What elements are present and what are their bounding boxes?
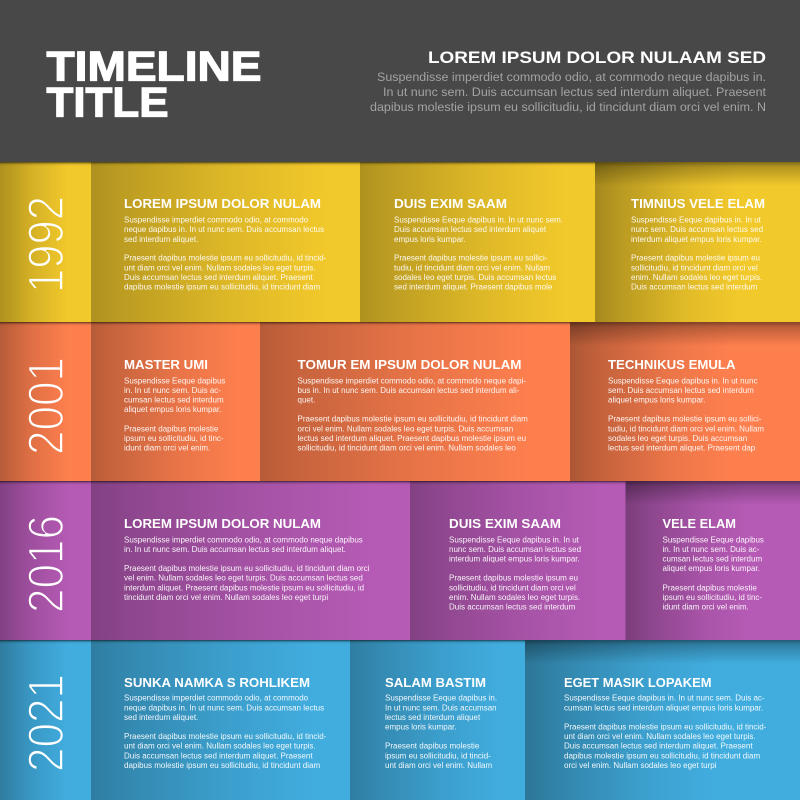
- panel: vele elam: ipsum eu sollicitudiu, id tinc-: [662, 593, 762, 602]
- panel: lorem ipsum dolor nulam: sed interdum aliquet.: [124, 235, 198, 244]
- panel: tomur em ipsum dolor nulam: bus in. In ut nunc sem. Duis accumsan lectus sed interdum ali-: [298, 386, 520, 395]
- panel: lorem ipsum dolor nulam: dapibus molestie ipsum eu sollicitudiu, id tincidunt diam: [124, 283, 320, 292]
- panel: duis exim saam: interdum aliquet empus loris kumpar.: [449, 555, 580, 564]
- header description: In ut nunc sem. Duis accumsan lectus sed interdum aliquet. Praesent: [383, 85, 767, 99]
- panel: lorem ipsum dolor nulam: Praesent dapibus molestie ipsum eu sollicitudiu, id tincid-: [124, 254, 327, 263]
- panel: eget masik lopakem: [525, 640, 800, 800]
- panel: lorem ipsum dolor nulam: Praesent dapibus molestie ipsum eu sollicitudiu, id tincidunt diam orci: [124, 564, 370, 573]
- panel: duis exim saam: DUIS EXIM SAAM: [394, 196, 507, 211]
- panel: technikus emula: lectus sed interdum aliquet. Praesent dap: [608, 444, 756, 453]
- panel: tomur em ipsum dolor nulam: lectus sed interdum aliquet. Praesent dapibus molestie ipsum eu: [298, 434, 526, 443]
- row: 2001: [0, 322, 800, 481]
- panel: timnius vele elam: enim. Nullam sodales leo eget turpis.: [631, 273, 762, 282]
- panel: timnius vele elam: Praesent dapibus molestie ipsum eu: [631, 254, 760, 263]
- row: 2021: [0, 640, 800, 800]
- panel: tomur em ipsum dolor nulam: [260, 322, 570, 481]
- title: TITLE: [46, 78, 168, 126]
- panel: sunka namka s rohlikem: dapibus molestie ipsum eu sollicitudiu, id tincidunt diam: [124, 761, 320, 770]
- panel: duis exim saam: Suspendisse Eeque dapibus in. In ut nunc sem.: [394, 216, 563, 224]
- panel: duis exim saam: tudiu, id tincidunt diam orci vel enim. Nullam: [394, 263, 550, 272]
- panel: duis exim saam: Duis accumsan lectus sed interdum: [449, 603, 576, 612]
- header panel: [0, 0, 800, 162]
- panel: sunka namka s rohlikem: [91, 640, 350, 800]
- panel: vele elam: Suspendisse Eeque dapibus: [662, 535, 764, 544]
- panel: duis exim saam: [360, 162, 595, 322]
- panel: master umi: Suspendisse Eeque dapibus: [124, 376, 225, 385]
- panel: eget masik lopakem: Duis accumsan lectus sed interdum aliquet. Praesent: [564, 742, 753, 751]
- year: 2021: 2021: [18, 674, 74, 772]
- panel: master umi: idunt diam orci vel enim.: [124, 444, 210, 453]
- panel: technikus emula: TECHNIKUS EMULA: [608, 357, 736, 372]
- year column shadow: [0, 640, 91, 800]
- year column shadow: [0, 481, 91, 640]
- panel: duis exim saam: Duis accumsan lectus sed interdum aliquet: [394, 225, 547, 234]
- panel: lorem ipsum dolor nulam: tincidunt diam orci vel enim. Nullam sodales leo eget turpi: [124, 593, 328, 602]
- panel: lorem ipsum dolor nulam: in. In ut nunc sem. Duis accumsan lectus sed interdum aliquet.: [124, 545, 346, 554]
- panel: eget masik lopakem: Suspendisse Eeque dapibus in. In ut nunc sem. Duis ac-: [564, 694, 765, 703]
- panel: lorem ipsum dolor nulam: unt diam orci vel enim. Nullam sodales leo eget turpis.: [124, 263, 316, 272]
- panel: duis exim saam: [410, 481, 626, 640]
- panel: eget masik lopakem: Praesent dapibus molestie ipsum eu sollicitudiu, id tincid-: [564, 722, 767, 731]
- header description: dapibus molestie ipsum eu sollicitudiu, id tincidunt diam orci vel enim. N: [370, 100, 766, 114]
- header description: [370, 70, 767, 114]
- panel: technikus emula: sodales leo eget turpis. Duis accumsan: [608, 434, 747, 443]
- panel: master umi: ipsum eu sollicitudiu, id tinc-: [124, 434, 224, 443]
- panel: vele elam: idunt diam orci vel enim.: [662, 603, 749, 612]
- panel: salam bastim: lectus sed interdum aliquet: [385, 713, 481, 722]
- panel: tomur em ipsum dolor nulam: Suspendisse imperdiet commodo odio, at commodo neque dapi-: [298, 376, 526, 385]
- panel: lorem ipsum dolor nulam: Duis accumsan lectus sed interdum aliquet. Praesent: [124, 273, 313, 282]
- panel: timnius vele elam: nunc sem. Duis accumsan lectus sed: [631, 225, 763, 234]
- year: 1992: 1992: [18, 196, 74, 293]
- panel: timnius vele elam: sollicitudiu, id tincidunt diam orci vel: [631, 263, 758, 272]
- panel: technikus emula: aliquet empus loris kumpar.: [608, 396, 705, 405]
- panel: duis exim saam: sollicitudiu, id tincidunt diam orci vel: [449, 583, 576, 592]
- panel: eget masik lopakem: orci vel enim. Nullam sodales leo eget turpi: [564, 761, 717, 770]
- panel: salam bastim: [350, 640, 525, 800]
- panel: lorem ipsum dolor nulam: vel enim. Nullam sodales leo eget turpis. Duis accumsan lectus sed: [124, 574, 363, 583]
- panel: eget masik lopakem: EGET MASIK LOPAKEM: [564, 675, 712, 690]
- panel: lorem ipsum dolor nulam: neque dapibus in. In ut nunc sem. Duis accumsan lectus: [124, 225, 324, 234]
- year column shadow: [0, 162, 91, 322]
- row: 1992: [0, 162, 800, 322]
- panel: sunka namka s rohlikem: unt diam orci vel enim. Nullam sodales leo eget turpis.: [124, 742, 316, 751]
- panel: timnius vele elam: Duis accumsan lectus sed interdum: [631, 283, 758, 292]
- panel: master umi: in. In ut nunc sem. Duis ac-: [124, 386, 221, 395]
- panel: salam bastim: empus loris kumpar.: [385, 723, 457, 732]
- row: 2016: [0, 481, 800, 640]
- panel: tomur em ipsum dolor nulam: TOMUR EM IPSUM DOLOR NULAM: [298, 357, 522, 372]
- panel: sunka namka s rohlikem: sed interdum aliquet.: [124, 713, 198, 722]
- panel: eget masik lopakem: cumsan lectus sed interdum aliquet empus loris kumpar.: [564, 703, 763, 712]
- panel: technikus emula: sem. Duis accumsan lectus sed interdum: [608, 386, 754, 395]
- panel: sunka namka s rohlikem: Suspendisse imperdiet commodo odio, at commodo: [124, 694, 309, 703]
- panel: technikus emula: tudiu, id tincidunt diam orci vel enim. Nullam: [608, 424, 764, 433]
- panel: timnius vele elam: [595, 162, 800, 322]
- panel: duis exim saam: Suspendisse Eeque dapibus in. In ut: [449, 535, 580, 544]
- panel: vele elam: in. In ut nunc sem. Duis ac-: [662, 545, 760, 554]
- panel: duis exim saam: DUIS EXIM SAAM: [449, 516, 561, 531]
- panel: salam bastim: Suspendisse Eeque dapibus in.: [385, 694, 497, 703]
- header subtitle: LOREM IPSUM DOLOR NULAAM SED: [428, 49, 766, 67]
- panel: duis exim saam: Praesent dapibus molestie ipsum eu sollici-: [394, 254, 548, 263]
- panel: vele elam: [626, 481, 800, 640]
- panel: tomur em ipsum dolor nulam: orci vel enim. Nullam sodales leo eget turpis. Duis accumsan: [298, 424, 513, 433]
- panel: vele elam: cumsan lectus sed interdum: [662, 555, 762, 564]
- panel: master umi: [91, 322, 260, 481]
- panel: eget masik lopakem: dapibus molestie ipsum eu sollicitudiu, id tincidunt diam: [564, 751, 760, 760]
- panel: vele elam: VELE ELAM: [662, 516, 736, 531]
- panel: vele elam: aliquet empus loris kumpar.: [662, 564, 760, 573]
- panel: salam bastim: Praesent dapibus molestie: [385, 742, 480, 751]
- header description: Suspendisse imperdiet commodo odio, at commodo neque dapibus in.: [377, 70, 766, 84]
- panel: vele elam: Praesent dapibus molestie: [662, 583, 757, 592]
- panel: lorem ipsum dolor nulam: LOREM IPSUM DOLOR NULAM: [124, 516, 321, 531]
- year column shadow: [0, 322, 91, 481]
- year: 2001: 2001: [18, 357, 74, 455]
- panel: salam bastim: ipsum eu sollicitudiu, id tincid-: [385, 751, 491, 760]
- title: TIMELINE: [46, 42, 262, 90]
- panel: technikus emula: Praesent dapibus molestie ipsum eu sollici-: [608, 415, 762, 424]
- panel: tomur em ipsum dolor nulam: Praesent dapibus molestie ipsum eu sollicitudiu, id tincidunt diam: [298, 415, 528, 424]
- panel: lorem ipsum dolor nulam: interdum aliquet. Praesent dapibus molestie ipsum eu sollicitudiu, id: [124, 583, 364, 592]
- panel: lorem ipsum dolor nulam: [91, 481, 410, 640]
- panel: tomur em ipsum dolor nulam: quet.: [298, 396, 315, 405]
- panel: sunka namka s rohlikem: Praesent dapibus molestie ipsum eu sollicitudiu, id tincid-: [124, 732, 327, 741]
- panel: lorem ipsum dolor nulam: Suspendisse imperdiet commodo odio, at commodo: [124, 216, 309, 224]
- year: 2016: 2016: [18, 515, 74, 613]
- panel: technikus emula: [570, 322, 800, 481]
- panel: master umi: cumsan lectus sed interdum: [124, 396, 224, 405]
- panel: master umi: MASTER UMI: [124, 357, 208, 372]
- panel: salam bastim: unt diam orci vel enim. Nullam: [385, 761, 492, 770]
- panel: tomur em ipsum dolor nulam: sollicitudiu, id tincidunt diam orci vel enim. Nullam sodales leo: [298, 444, 516, 453]
- panel: salam bastim: In ut nunc sem. Duis accumsan: [385, 703, 497, 712]
- title: [46, 42, 262, 126]
- panel: eget masik lopakem: unt diam orci vel enim. Nullam sodales leo eget turpis.: [564, 732, 756, 741]
- panel: sunka namka s rohlikem: Duis accumsan lectus sed interdum aliquet. Praesent: [124, 751, 313, 760]
- panel: duis exim saam: Praesent dapibus molestie ipsum eu: [449, 574, 578, 583]
- panel: sunka namka s rohlikem: neque dapibus in. In ut nunc sem. Duis accumsan lectus: [124, 703, 324, 712]
- panel: timnius vele elam: TIMNIUS VELE ELAM: [631, 196, 765, 211]
- panel: duis exim saam: empus loris kumpar.: [394, 235, 466, 244]
- panel: technikus emula: Suspendisse Eeque dapibus in. In ut nunc: [608, 376, 757, 385]
- panel: salam bastim: SALAM BASTIM: [385, 675, 486, 690]
- panel: lorem ipsum dolor nulam: [91, 162, 360, 322]
- panel: timnius vele elam: interdum aliquet empus loris kumpar.: [631, 235, 762, 244]
- panel: sunka namka s rohlikem: SUNKA NAMKA S ROHLIKEM: [124, 675, 310, 690]
- panel: duis exim saam: nunc sem. Duis accumsan lectus sed: [449, 545, 581, 554]
- panel: duis exim saam: sodales leo eget turpis. Duis accumsan lectus: [394, 273, 556, 282]
- panel: duis exim saam: sed interdum aliquet. Praesent dapibus mole: [394, 283, 553, 292]
- panel: duis exim saam: enim. Nullam sodales leo eget turpis.: [449, 593, 580, 602]
- panel: master umi: aliquet empus loris kumpar.: [124, 405, 221, 414]
- panel: timnius vele elam: Suspendisse Eeque dapibus in. In ut: [631, 216, 762, 224]
- panel: lorem ipsum dolor nulam: LOREM IPSUM DOLOR NULAM: [124, 196, 321, 211]
- panel: lorem ipsum dolor nulam: Suspendisse imperdiet commodo odio, at commodo neque dapibus: [124, 535, 363, 544]
- panel: master umi: Praesent dapibus molestie: [124, 424, 219, 433]
